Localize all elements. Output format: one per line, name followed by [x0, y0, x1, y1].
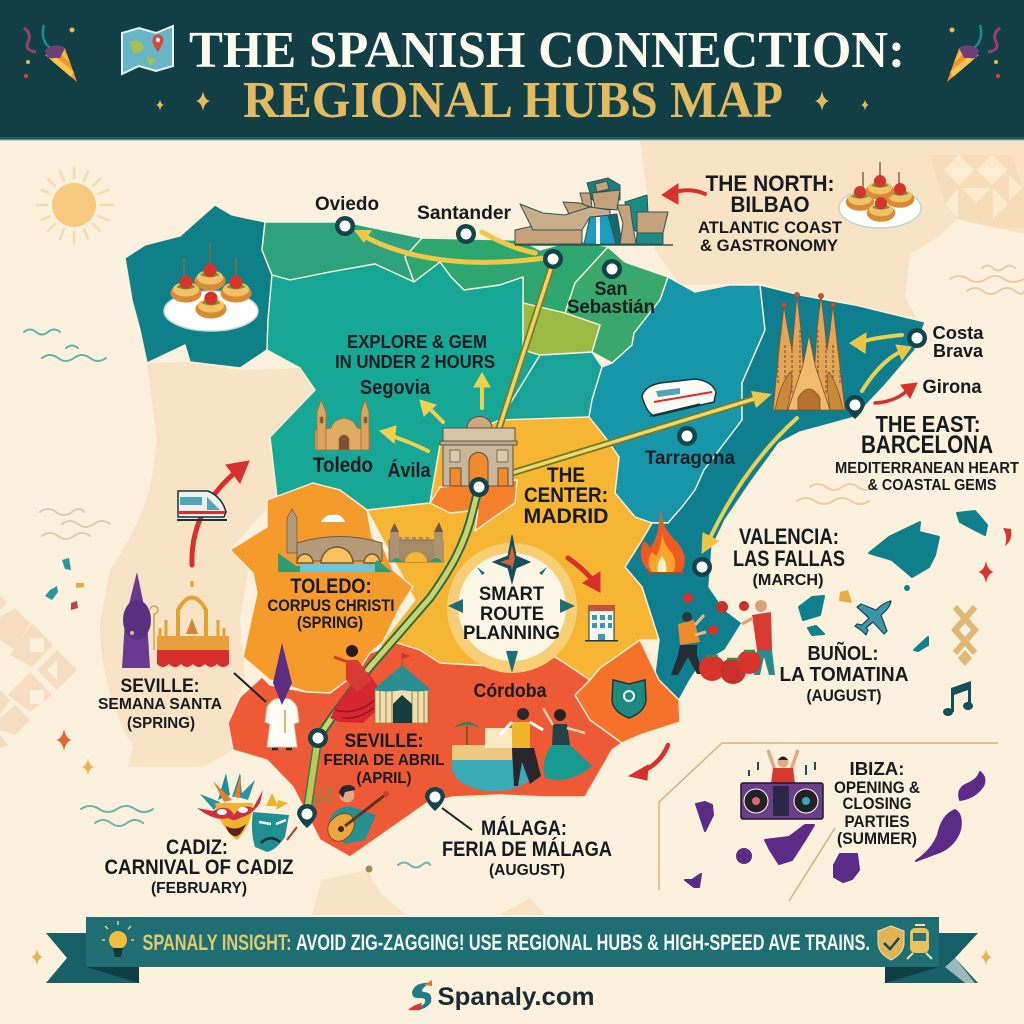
icon: music note [943, 681, 973, 716]
label: explore gem: IN UNDER 2 HOURS [335, 352, 495, 372]
icon: Seville paso [157, 581, 229, 667]
label: Cadiz carnival: (FEBRUARY) [151, 880, 247, 897]
pin: Bilbao [543, 249, 563, 269]
label: San Sebastian: San [594, 279, 628, 300]
title line one: THE SPANISH CONNECTION: [189, 22, 905, 79]
label: Costa Brava [932, 323, 985, 361]
insight banner [46, 917, 978, 983]
label: explore gem: EXPLORE & GEM [347, 332, 487, 352]
label: Seville Feria de Abril [324, 731, 445, 787]
label: Ibiza parties: OPENING & [834, 778, 920, 797]
connector: Malaga [442, 808, 472, 830]
icon: party popper right [947, 25, 1000, 82]
banner right tail highlight [945, 958, 975, 983]
pin: Seville [308, 728, 328, 748]
brand logo [408, 980, 432, 1010]
icon: hotel [585, 605, 618, 642]
icon: Puerta de Alcala [440, 417, 517, 486]
label: Ibiza parties [834, 759, 920, 848]
label: Cadiz carnival: CARNIVAL OF CADIZ [104, 856, 294, 879]
label: Bunol La Tomatina: BUÑOL: [808, 642, 878, 665]
banner fold shadows [86, 967, 939, 983]
arrows: Barcelona to Costa Brava and Valencia [702, 333, 911, 553]
label: Cadiz carnival: CADIZ: [166, 836, 228, 859]
icon: compass star [493, 535, 530, 583]
label: Bunol La Tomatina: LA TOMATINA [780, 664, 908, 686]
confetti left [45, 558, 84, 610]
label: Seville Feria de Abril: FERIA DE ABRIL [324, 752, 445, 769]
icon: Sagrada Familia [773, 292, 845, 410]
label: Ibiza parties: CLOSING [842, 794, 912, 813]
island: La Palma [696, 802, 713, 831]
label: Toledo Corpus Christi: CORPUS CHRISTI [268, 596, 394, 615]
land: Portugal [100, 362, 315, 767]
icon: carnival masks [197, 773, 289, 852]
label: The East Barcelona: & COASTAL GEMS [868, 477, 997, 494]
label: The Center Madrid: CENTER: [524, 484, 608, 507]
icon: light bulb [102, 921, 134, 957]
icon: Seville Nazareno purple [122, 572, 158, 668]
pin: San Sebastian [602, 259, 622, 279]
sparkles left bottom [31, 729, 992, 965]
label: Toledo Corpus Christi [268, 575, 394, 632]
label: Oviedo: Oviedo [315, 194, 379, 215]
banner text: insight label: SPANALY INSIGHT: [142, 930, 292, 955]
decor: Gibraltar dot [366, 866, 372, 872]
label: Costa Brava: Costa [932, 323, 985, 343]
icon: fair tent [373, 652, 431, 723]
arrows: Madrid to Segovia, Avila, north [380, 373, 490, 451]
label: The East Barcelona: BARCELONA [861, 431, 993, 459]
decor: geometric pattern right [930, 155, 1024, 228]
circle halo [447, 543, 577, 673]
region: Galicia [125, 205, 272, 368]
pin: Costa Brava [907, 328, 927, 348]
island: Ibiza [799, 596, 824, 620]
label: San Sebastian: Sebastián [567, 297, 655, 318]
label: The North Bilbao: THE NORTH: [706, 171, 834, 196]
header sparkles [156, 91, 869, 111]
label: Malaga feria: MÁLAGA: [481, 817, 567, 840]
arrows: red [192, 184, 917, 780]
label: The Center Madrid: MADRID [524, 505, 608, 528]
icon: La Tomatina figures [671, 593, 775, 684]
region: Murcia [575, 640, 680, 743]
label: Valencia Las Fallas: (MARCH) [752, 572, 824, 589]
label: Seville Semana Santa: SEMANA SANTA [98, 696, 222, 713]
icon: train west [177, 491, 227, 521]
label: The Center Madrid [524, 464, 608, 528]
icon: plane [855, 601, 891, 635]
label: smart route planning: SMART [479, 584, 544, 605]
island: Cabrera [905, 586, 909, 590]
pin: Tarragona [677, 426, 697, 446]
circle core [458, 553, 566, 661]
arrow: Madrid hotel [568, 558, 600, 592]
label: Cordoba: Córdoba [474, 681, 547, 702]
map of Spain [125, 205, 925, 857]
icon: shield check [878, 926, 904, 960]
icon: flame [641, 508, 685, 574]
label: The North Bilbao [698, 171, 843, 255]
brand wordmark: Spanaly.com [438, 983, 594, 1011]
pin: Oviedo [335, 216, 355, 236]
icon: train front [907, 925, 932, 959]
icon: train north [642, 379, 716, 416]
label: Seville Semana Santa [98, 676, 222, 732]
label: The North Bilbao: BILBAO [730, 192, 810, 217]
routes [307, 230, 911, 812]
pin: Barcelona [845, 395, 865, 419]
arrow: to Canaries [629, 745, 668, 780]
accent: red small stroke [287, 827, 297, 840]
label: Valencia Las Fallas: LAS FALLAS [733, 546, 845, 571]
pin: Malaga [425, 787, 445, 811]
label: smart route planning: ROUTE [480, 604, 544, 625]
island: Gran Canaria [834, 854, 859, 882]
label: Girona: Girona [922, 377, 982, 398]
region: Catalonia and Valencia coast [625, 285, 925, 700]
region: Andalusia [228, 643, 622, 857]
pin: Madrid [469, 477, 489, 497]
label: Bunol La Tomatina: (AUGUST) [806, 686, 882, 705]
decor: waves [24, 266, 1024, 868]
brand: Spanaly [408, 980, 594, 1011]
label: Seville Feria de Abril: SEVILLE: [344, 731, 424, 752]
label: Valencia Las Fallas [733, 524, 845, 589]
icon: tapas plate north [839, 162, 921, 228]
centre circle: smart route planning [447, 535, 577, 673]
label: Santander: Santander [417, 203, 512, 224]
label: Seville Feria de Abril: (APRIL) [356, 770, 412, 787]
icon: shield [612, 680, 646, 718]
label: Malaga feria [442, 817, 612, 879]
island: La Gomera [737, 849, 751, 863]
icon: guitar player [314, 785, 389, 844]
region: orange corner by Madrid [430, 480, 517, 531]
icon: Avila wall [389, 522, 443, 562]
region: Extremadura [230, 483, 413, 693]
region: teal wedge east [500, 352, 602, 420]
region: Navarra Basque [565, 247, 668, 363]
label: smart route planning [463, 584, 560, 644]
label: Ibiza parties: IBIZA: [850, 759, 904, 779]
icon: Guggenheim Bilbao [515, 178, 673, 245]
label: San Sebastian [567, 279, 655, 318]
label: The North Bilbao: ATLANTIC COAST [698, 218, 843, 237]
island: Formentera [808, 626, 824, 635]
label: smart route planning: PLANNING [463, 623, 560, 644]
label: Tarragona: Tarragona [645, 448, 735, 469]
pin: Valencia [692, 557, 712, 577]
pin: Santander [456, 224, 476, 244]
pins [297, 216, 927, 828]
region: La Rioja [523, 303, 600, 355]
label: Ibiza parties: PARTIES [844, 812, 910, 831]
icon: gold lattice ornament [955, 607, 975, 666]
island: Tenerife [765, 825, 814, 864]
label: Cadiz carnival [104, 836, 294, 897]
region: Asturias [262, 222, 422, 282]
label: Avila: Ávila [388, 459, 431, 482]
label: Toledo: Toledo [313, 454, 373, 477]
banner left tail [46, 933, 139, 983]
arrow: Girona [875, 383, 917, 403]
label: Costa Brava: Brava [933, 341, 984, 361]
region: Castilla [267, 262, 540, 510]
islands: Balearic [799, 511, 987, 651]
label: Malaga feria: FERIA DE MÁLAGA [442, 838, 612, 861]
route: Madrid to Barcelona [512, 391, 772, 473]
label: Segovia: Segovia [360, 377, 431, 399]
label: explore gem [335, 332, 495, 372]
icon: Malaga seaside [452, 722, 536, 791]
land: France [640, 141, 1024, 318]
island: El Hierro [685, 874, 701, 887]
island: Menorca [957, 511, 987, 535]
islands: Canary [685, 772, 984, 887]
banner right tail [885, 933, 978, 983]
label: The Center Madrid: THE [547, 464, 585, 487]
connector: Seville procession [234, 673, 266, 702]
icon: tapas plate west [164, 242, 258, 331]
compass marks [448, 567, 575, 673]
label: Valencia Las Fallas: VALENCIA: [739, 524, 839, 549]
icon: Toledo cathedral [315, 400, 370, 450]
route: Madrid to Bilbao [480, 262, 553, 487]
label: Bunol La Tomatina [780, 642, 908, 705]
labels [98, 171, 1019, 897]
label: Toledo Corpus Christi: TOLEDO: [290, 575, 372, 598]
header band [0, 0, 1024, 141]
island: Fuerteventura [916, 810, 961, 861]
island: sliver [914, 637, 928, 651]
icon: DJ decks [741, 750, 823, 819]
icon: dancers [500, 708, 592, 786]
route: Madrid to Seville to Cadiz [307, 490, 478, 812]
label: Seville Semana Santa: (SPRING) [127, 715, 195, 732]
icon: flamenco dancer [330, 645, 385, 723]
island: Lanzarote [959, 772, 984, 800]
label: The East Barcelona [835, 411, 1019, 494]
island: Mallorca [869, 522, 939, 577]
label: Malaga feria: (AUGUST) [489, 862, 565, 879]
label: Ibiza parties: (SUMMER) [837, 829, 917, 848]
icon: sun [37, 168, 113, 243]
icon: Toledo bridge [278, 509, 392, 572]
icon: Nazareno white [265, 643, 299, 749]
arrow: red to France [662, 184, 705, 204]
land: Morocco [312, 870, 545, 915]
route: Bilbao to Oviedo and Santander [354, 230, 545, 262]
banner body [86, 917, 939, 967]
inset frame: Canary islands [659, 743, 998, 901]
icon: party popper left [24, 25, 77, 82]
decor: geometric pattern left [0, 595, 77, 748]
icon: folded map [122, 26, 173, 74]
label: The East Barcelona: THE EAST: [876, 411, 980, 437]
label: Toledo Corpus Christi: (SPRING) [297, 613, 363, 632]
title line two: REGIONAL HUBS MAP [243, 72, 783, 129]
region: central Madrid [367, 417, 659, 690]
label: The North Bilbao: & GASTRONOMY [700, 236, 839, 255]
arrow: red Portugal [192, 461, 249, 565]
region: Cantabria and Basque west [405, 238, 608, 313]
accents: small confetti right [839, 528, 1011, 603]
label: Seville Semana Santa: SEVILLE: [120, 676, 200, 697]
pin: Cadiz [297, 804, 317, 828]
region: Aragon [589, 277, 765, 523]
